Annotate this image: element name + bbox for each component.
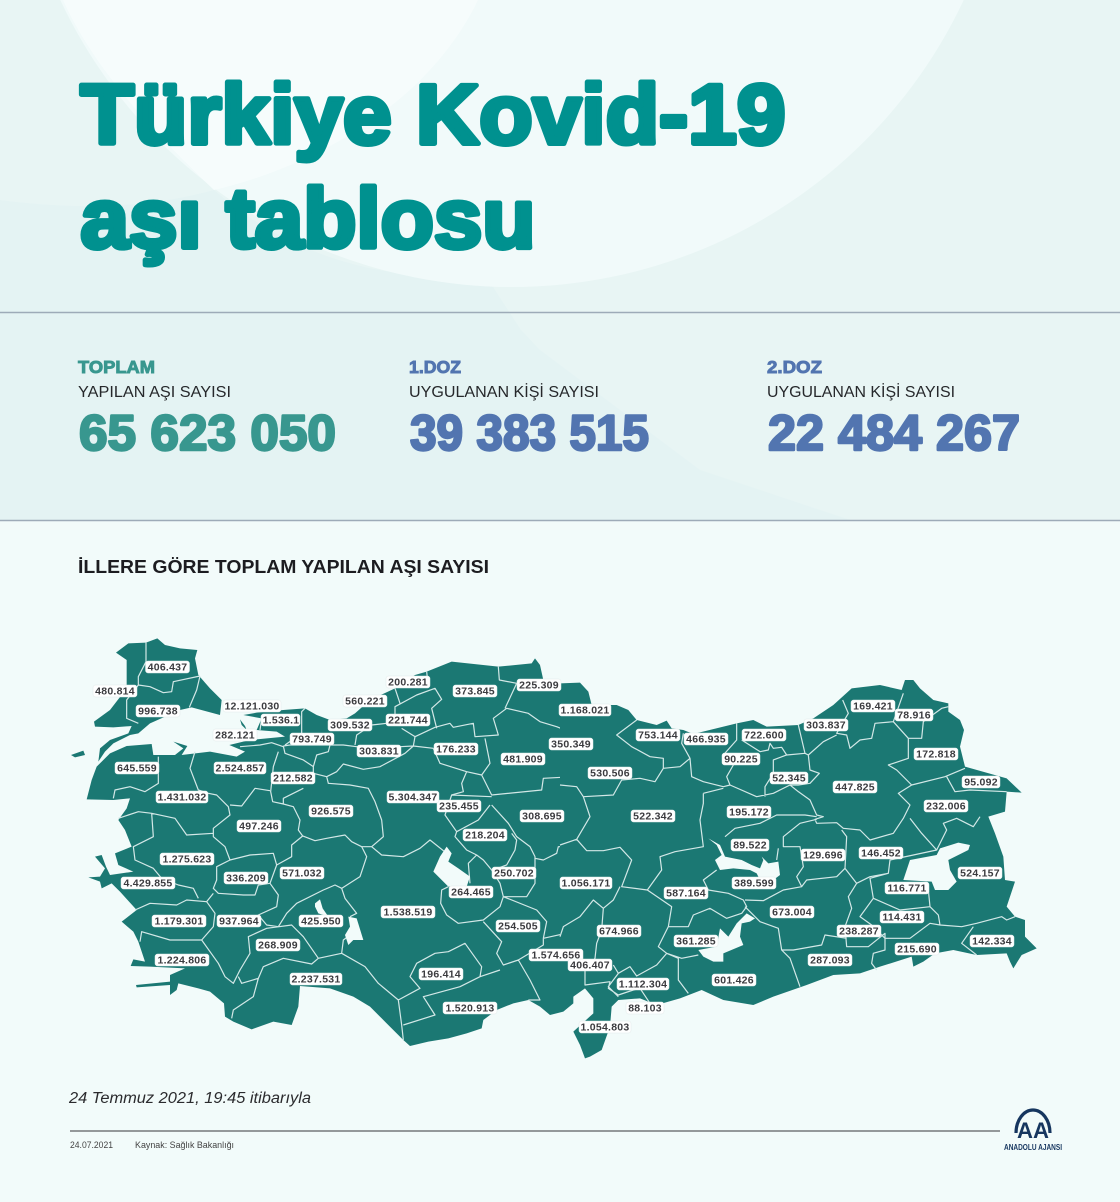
value: 212.582: 212.582 — [273, 773, 313, 785]
map: western province borders — [113, 643, 573, 1040]
value: 1.224.806: 1.224.806 — [158, 955, 206, 967]
value: 2.524.857: 2.524.857 — [216, 763, 264, 775]
value: 406.437: 406.437 — [148, 662, 187, 674]
value: 1.056.171: 1.056.171 — [562, 878, 610, 890]
footer source: Kaynak: Sağlık Bakanlığı — [135, 1140, 234, 1150]
value: 674.966: 674.966 — [599, 926, 639, 938]
stat: first dose: 39 383 515 — [410, 405, 649, 461]
value: 1.054.803: 1.054.803 — [581, 1022, 629, 1034]
value: 1.112.304: 1.112.304 — [619, 979, 667, 991]
value: 169.421: 169.421 — [853, 701, 893, 713]
map: Tuz lake — [433, 847, 470, 887]
value: 1.520.913: 1.520.913 — [446, 1003, 494, 1015]
stat: second dose: 2.DOZ — [767, 357, 822, 377]
value: 793.749: 793.749 — [292, 734, 332, 746]
value: 350.349: 350.349 — [551, 739, 591, 751]
value: 937.964: 937.964 — [219, 916, 259, 928]
map: Van lake — [903, 843, 970, 890]
value: 89.522: 89.522 — [733, 840, 767, 852]
footer date: 24.07.2021 — [70, 1140, 113, 1150]
value: 1.538.519: 1.538.519 — [384, 907, 432, 919]
value: 142.334: 142.334 — [972, 936, 1012, 948]
date note: 24 Temmuz 2021, 19:45 itibarıyla — [68, 1090, 311, 1107]
value: 524.157: 524.157 — [960, 868, 1000, 880]
value: 466.935: 466.935 — [686, 734, 726, 746]
value: 926.575: 926.575 — [311, 806, 351, 818]
stat: second dose — [767, 357, 1020, 461]
value: 303.831: 303.831 — [359, 746, 399, 758]
value: 282.121: 282.121 — [215, 730, 255, 742]
value: 176.233: 176.233 — [436, 744, 476, 756]
map: Egirdir lake — [315, 899, 328, 917]
value: 235.455: 235.455 — [439, 801, 479, 813]
value: 336.209: 336.209 — [226, 873, 266, 885]
value: 52.345: 52.345 — [772, 773, 806, 785]
value: 309.532: 309.532 — [330, 720, 370, 732]
value: 522.342: 522.342 — [633, 811, 673, 823]
value: 722.600: 722.600 — [744, 730, 784, 742]
map of Turkey — [71, 638, 1037, 1058]
map: Ataturk dam lake — [698, 913, 755, 962]
value: 250.702: 250.702 — [494, 868, 534, 880]
value: 287.093: 287.093 — [810, 955, 850, 967]
title — [80, 68, 785, 266]
value: 218.204: 218.204 — [465, 830, 505, 842]
title: aşı tablosu — [80, 172, 536, 266]
map: western provinces — [71, 638, 573, 1046]
value: 129.696: 129.696 — [803, 850, 843, 862]
logo: Anadolu Ajansı — [1004, 1110, 1062, 1152]
value: 303.837: 303.837 — [806, 720, 846, 732]
value: 308.695: 308.695 — [522, 811, 562, 823]
stat: second dose: UYGULANAN KİŞİ SAYISI — [767, 382, 955, 401]
value: 571.032: 571.032 — [282, 868, 322, 880]
value: 1.179.301: 1.179.301 — [155, 916, 203, 928]
value: 95.092: 95.092 — [964, 777, 998, 789]
stat: total vaccinations: YAPILAN AŞI SAYISI — [78, 384, 231, 401]
value: 221.744: 221.744 — [388, 715, 428, 727]
stat: total vaccinations: 65 623 050 — [79, 405, 336, 461]
value: 90.225: 90.225 — [724, 754, 758, 766]
stat: first dose — [409, 357, 649, 461]
value: 1.574.656: 1.574.656 — [532, 950, 580, 962]
value: 645.559: 645.559 — [117, 763, 157, 775]
value: 497.246: 497.246 — [239, 821, 279, 833]
map: Beysehir lake — [345, 917, 363, 945]
value: 114.431: 114.431 — [882, 912, 922, 924]
stat: total vaccinations: TOPLAM — [78, 357, 155, 377]
value: 1.275.623: 1.275.623 — [163, 854, 211, 866]
value: 481.909: 481.909 — [503, 754, 543, 766]
map: eastern provinces — [560, 680, 1037, 1058]
value: 560.221: 560.221 — [345, 696, 385, 708]
value: 4.429.855: 4.429.855 — [124, 878, 172, 890]
value: 447.825: 447.825 — [835, 782, 875, 794]
value: 232.006: 232.006 — [926, 801, 966, 813]
stat: second dose: 22 484 267 — [768, 405, 1020, 461]
value: 215.690: 215.690 — [897, 944, 937, 956]
value: 88.103: 88.103 — [628, 1003, 662, 1015]
value: 373.845: 373.845 — [455, 686, 495, 698]
map: province value labels — [93, 661, 1014, 1034]
map: Keban dam lake — [708, 838, 780, 880]
value: 116.771: 116.771 — [887, 883, 927, 895]
value: 1.536.1: 1.536.1 — [263, 715, 299, 727]
value: 225.309: 225.309 — [519, 680, 559, 692]
value: 673.004: 673.004 — [772, 907, 812, 919]
value: 361.285: 361.285 — [676, 936, 716, 948]
value: 587.164: 587.164 — [666, 888, 706, 900]
stat: total vaccinations — [78, 357, 336, 461]
value: 2.237.531: 2.237.531 — [292, 974, 340, 986]
value: 996.738: 996.738 — [138, 706, 178, 718]
stat: first dose: 1.DOZ — [409, 357, 461, 377]
value: 172.818: 172.818 — [916, 749, 956, 761]
value: 425.950: 425.950 — [301, 916, 341, 928]
value: 254.505: 254.505 — [498, 921, 538, 933]
value: 1.168.021: 1.168.021 — [561, 705, 609, 717]
value: 601.426: 601.426 — [714, 975, 754, 987]
value: 530.506: 530.506 — [590, 768, 630, 780]
stat: first dose: UYGULANAN KİŞİ SAYISI — [409, 382, 599, 401]
header and statistics background — [0, 0, 1120, 520]
value: 264.465: 264.465 — [451, 887, 491, 899]
value: 78.916: 78.916 — [897, 710, 931, 722]
value: 12.121.030: 12.121.030 — [224, 701, 280, 713]
title: Türkiye Kovid-19 — [80, 68, 785, 162]
value: 146.452: 146.452 — [861, 848, 901, 860]
logo: Anadolu Ajansı: AA — [1017, 1118, 1049, 1143]
value: 5.304.347: 5.304.347 — [389, 792, 437, 804]
value: 268.909: 268.909 — [258, 940, 298, 952]
map heading: İLLERE GÖRE TOPLAM YAPILAN AŞI SAYISI — [78, 557, 489, 577]
value: 1.431.032: 1.431.032 — [158, 792, 206, 804]
value: 196.414: 196.414 — [421, 969, 461, 981]
value: 406.407: 406.407 — [570, 960, 610, 972]
value: 389.599: 389.599 — [734, 878, 774, 890]
logo: Anadolu Ajansı: ANADOLU AJANSI — [1004, 1143, 1062, 1152]
value: 753.144: 753.144 — [638, 730, 678, 742]
value: 195.172: 195.172 — [729, 807, 769, 819]
value: 200.281: 200.281 — [388, 677, 428, 689]
value: 238.287: 238.287 — [839, 926, 879, 938]
map: eastern province borders — [560, 693, 1015, 1003]
value: 480.814: 480.814 — [95, 686, 135, 698]
